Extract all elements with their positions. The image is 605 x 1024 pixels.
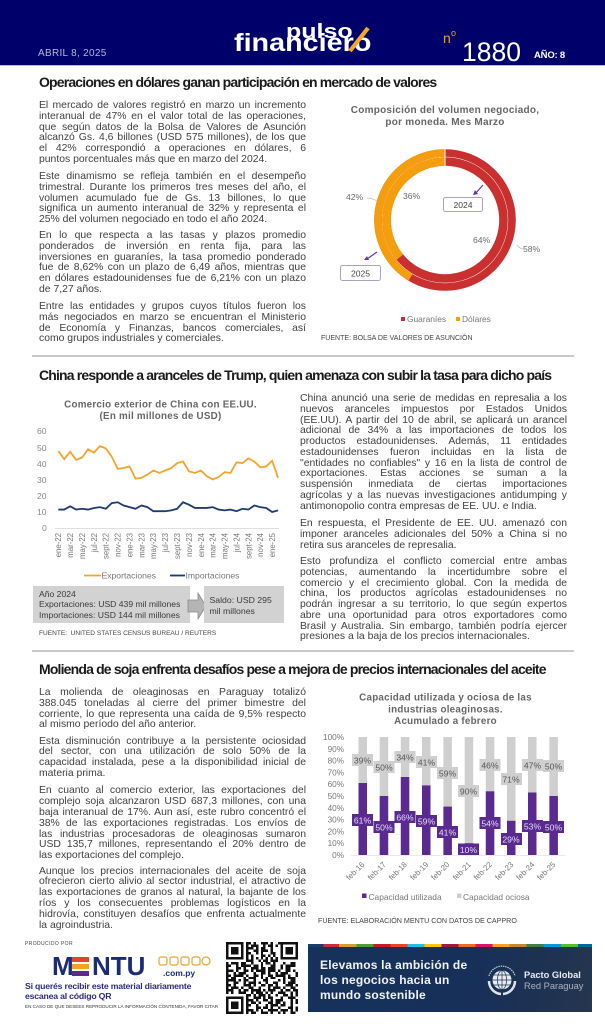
legend: Capacidad ociosa: [463, 892, 530, 902]
x axis labels: jul-24: [232, 532, 242, 553]
text block: section 3: del sector, con una utilización de solo 50% de la: [39, 746, 306, 757]
text block: section 2: potencias, aumentando la incertidumbre sobre el: [300, 567, 567, 578]
footer: producido por: [25, 941, 218, 1009]
text block: section 1: de Economía y Finanzas, bancos comerciales, así: [39, 323, 306, 334]
x axis labels: ene-25: [268, 532, 277, 557]
icon: UN Global Compact: [488, 966, 516, 996]
labels: capacidad utilizada: 29%: [502, 834, 520, 844]
x axis labels: nov-24: [256, 532, 265, 557]
text block: section 1: Entre las entidades y grupos cuyos títulos fueron los: [39, 301, 306, 312]
text block: section 2: estadounidenses fueron incluidas en la lista de: [300, 447, 567, 458]
text block: section 3: La molienda de oleaginosas en Paraguay totalizó: [39, 687, 306, 698]
legend: [362, 892, 530, 902]
text block: section 2: presiones a la baja de los precios internacionales.: [300, 631, 530, 642]
source: section 1: FUENTE: BOLSA DE VALORES DE ASUNCIÓN: [321, 335, 473, 342]
x axis labels: feb-25: [535, 860, 558, 882]
text block: section 2: Esto profundiza el conflicto comercial entre ambas: [300, 556, 567, 567]
text block: section 2: podrán ingresar a su territorio, lo que según expertos: [300, 599, 567, 610]
x axis labels: mar-24: [208, 532, 218, 558]
arrow: saldo: [188, 592, 204, 620]
labels: capacidad ociosa: 34%: [396, 752, 414, 762]
labels: capacidad ociosa: 47%: [524, 760, 541, 770]
text block: section 1: de 7,27 años.: [39, 284, 102, 295]
chart: donut composición por moneda: [340, 105, 541, 324]
text block: section 3: corriente, lo que representa una caída de 9,5% respecto: [39, 709, 306, 720]
callout: año 2024: Exportaciones: USD 439 mil millones: [39, 599, 180, 609]
y axis labels: 40: [37, 459, 47, 469]
text block: section 3: Esta disminución contribuye a la persistente ociosidad: [39, 736, 306, 747]
y axis labels: 60: [37, 426, 47, 436]
y axis labels: 10%: [328, 839, 344, 848]
callout: año 2024: [33, 586, 190, 623]
text block: section 2: abre una oportunidad para otros exportadores como: [300, 610, 567, 621]
logo: pulso financiero: pulso: [286, 21, 352, 43]
x axis labels: feb-17: [366, 860, 388, 882]
x axis labels: ene-22: [54, 533, 63, 557]
chart title: Capacidad utilizada y ociosa de las: [359, 692, 532, 704]
labels: capacidad ociosa: 39%: [354, 756, 371, 766]
x axis labels: ene-23: [126, 533, 134, 557]
text block: section 1: fue de 8,62% con un plazo de 6,49 años, mientras que: [39, 262, 306, 273]
x axis labels: mar-23: [138, 533, 146, 558]
SDG colour strip: [308, 944, 592, 947]
text block: section 1: interanual de 47% en el valor total de las operaciones,: [39, 111, 306, 122]
text block: section 3: la agroindustria.: [39, 920, 113, 931]
value labels: 58%: [523, 244, 541, 254]
source: section 2: FUENTE: UNITED STATES CENSUS BUREAU / REUTERS: [39, 630, 216, 637]
heading: section 1: Operaciones en dólares ganan participación en mercado de valores: [39, 74, 436, 90]
x axis labels: ene-24: [197, 532, 206, 557]
text block: section 2: exportaciones. Estas acciones se suman a la: [300, 468, 567, 479]
text block: section 2: suspensión inmediata de ciertas importaciones: [300, 479, 567, 490]
text block: section 2: En respuesta, el Presidente de EE. UU. amenazó con: [300, 518, 567, 529]
labels: capacidad ociosa: 71%: [502, 774, 520, 784]
logo: MENTU: NTU: [92, 951, 145, 981]
labels: capacidad utilizada: 66%: [396, 812, 414, 822]
y axis labels: [37, 426, 47, 533]
text block: section 2: imponer aranceles adicionales del 50% a China si no: [300, 529, 567, 540]
x axis labels: feb-21: [451, 860, 473, 882]
text block: section 1: [39, 100, 306, 344]
text block: section 3: las exportaciones del complejo.: [39, 850, 184, 861]
text block: section 1: en dólares estadounidenses fue de 6,21% con un plazo: [39, 273, 306, 284]
value labels: 36%: [403, 191, 421, 201]
text block: section 2: china, los productos agrícolas estadounidenses no: [300, 588, 567, 599]
y axis labels: 0: [42, 523, 47, 533]
x axis labels: feb-18: [387, 860, 409, 882]
text block: section 2: (EE.UU). A partir del 10 de abril, se aplicará un arancel: [300, 414, 567, 426]
text block: section 2: China anunció una serie de medidas en represalia a los: [300, 393, 567, 404]
legend: Exportaciones: [102, 570, 156, 580]
text block: section 2: productos estadounidenses. Además, 11 entidades: [300, 436, 567, 447]
text block: section 3: USD 135,7 millones, representando el 20% dentro de: [39, 839, 306, 850]
y axis labels: 50%: [328, 792, 344, 801]
x axis labels: feb-20: [429, 860, 452, 882]
value labels: [346, 191, 541, 254]
text block: section 3: capacidad instalada, pese a la disponibilidad inicial de: [39, 757, 306, 768]
x axis labels: jul-22: [90, 533, 99, 553]
bars: capacidad ociosa: [358, 737, 558, 855]
banner message: [320, 958, 467, 1002]
banner logo text: [524, 970, 584, 991]
text block: section 1: En lo que respecta a las tasas y plazos promedio: [39, 230, 306, 241]
callout 2024: 2024: [453, 200, 473, 210]
banner message: los negocios hacia un: [320, 973, 450, 987]
text block: section 3: ofrecieron cierto alivio al sector industrial, el atractivo de: [39, 876, 306, 887]
heading: section 3: Molienda de soja enfrenta desafíos pese a mejora de precios internacionales del aceite: [39, 661, 546, 677]
text block: section 2: antimonopolio contra empresas de EE. UU. e India.: [300, 500, 537, 512]
chart title: (En mil millones de USD): [100, 411, 221, 422]
banner: Pacto Global: [308, 944, 592, 1012]
y axis labels: 20: [37, 491, 47, 501]
outer ring 2025: [378, 153, 512, 287]
chart title: Acumulado a febrero: [394, 716, 497, 727]
labels: capacidad utilizada: 41%: [439, 828, 456, 838]
call to action: Si querés recibir este material diariamente: [25, 981, 191, 991]
chart title: por moneda. Mes Marzo: [385, 117, 505, 128]
value labels: 64%: [473, 235, 491, 245]
x axis labels: jul-23: [161, 533, 170, 553]
text block: section 1: ponderados de inversión en renta fija, para las: [39, 241, 306, 252]
x axis labels: mar-22: [66, 533, 75, 558]
labels: capacidad utilizada: [352, 811, 564, 855]
x axis labels: [344, 860, 558, 882]
logo: MENTU: [52, 951, 145, 981]
text block: section 3: complejo soja alcanzaron USD 687,3 millones, con una: [39, 796, 306, 807]
chart title: Composición del volumen negociado,: [351, 105, 539, 116]
callout: saldo: [204, 586, 284, 623]
text block: section 2: [300, 393, 568, 642]
produced-by label: PRODUCIDO POR: [25, 941, 73, 947]
chart title: industrias oleaginosas.: [388, 704, 503, 716]
legend: Capacidad utilizada: [368, 892, 442, 902]
call to action: escanea al código QR: [25, 990, 111, 1000]
text block: section 1: que según datos de la Bolsa de Valores de Asunción: [39, 122, 306, 133]
labels: capacidad utilizada: 54%: [481, 818, 499, 828]
y axis labels: 50: [37, 443, 47, 453]
text block: section 1: puntos porcentuales más que en marzo del 2024.: [39, 154, 267, 165]
y axis labels: 100%: [323, 733, 344, 742]
y axis labels: 0%: [332, 851, 344, 860]
bars: capacidad utilizada: [358, 777, 558, 855]
callout: saldo: Saldo: USD 295: [210, 595, 272, 605]
y axis labels: 80%: [328, 757, 344, 766]
labels: capacidad utilizada: 50%: [545, 822, 562, 832]
x axis labels: feb-23: [493, 860, 515, 882]
text block: section 3: En cuanto al comercio exterior, las exportaciones del: [39, 785, 306, 796]
text block: section 1: El mercado de valores registró en marzo un incremento: [39, 100, 306, 111]
text block: section 3: hidrovía, constituyen desafíos que enfrenta actualmente: [39, 909, 306, 920]
x axis labels: may-23: [149, 533, 158, 559]
labels: capacidad utilizada: 50%: [375, 822, 393, 832]
logo: pulso financiero: financiero: [234, 29, 371, 57]
legend: Dólares: [462, 314, 491, 324]
x axis labels: feb-16: [344, 860, 366, 882]
y axis labels: 20%: [328, 827, 344, 836]
x axis labels: feb-24: [514, 860, 537, 882]
y axis labels: 90%: [328, 745, 344, 754]
text block: section 2: agrícolas y a las nuevas investigaciones antidumping y: [300, 490, 567, 501]
logo: MENTU: M: [52, 951, 74, 981]
icon: QR code: [226, 942, 298, 1014]
legend: [84, 570, 239, 580]
text block: section 1: Este dinamismo se refleja también en el desempeño: [39, 171, 306, 182]
x axis labels: nov-22: [114, 533, 122, 557]
labels: capacidad utilizada: 53%: [524, 822, 541, 832]
text block: section 2: "entidades no confiables" y 16 en la lista de control de: [300, 458, 567, 468]
text block: section 3: las exportaciones de granos al natural, la bajante de los: [39, 887, 306, 898]
labels: capacidad ociosa: 41%: [418, 758, 435, 768]
text block: section 3: baja interanual de 17%. Aun así, este rubro concentró el: [39, 807, 306, 818]
text block: section 3: [39, 687, 306, 931]
labels: capacidad ociosa: 50%: [545, 762, 562, 772]
logo slash: [348, 26, 370, 52]
x axis labels: may-22: [78, 533, 87, 559]
labels: capacidad ociosa: 90%: [460, 786, 477, 796]
labels: capacidad ociosa: 59%: [439, 768, 456, 778]
y axis labels: 60%: [328, 780, 344, 789]
callout: año 2024: Año 2024: [39, 589, 76, 599]
text block: section 2: Brasil y Australia. Sin embargo, también podría ejercer: [300, 620, 567, 632]
x axis labels: feb-22: [472, 860, 494, 882]
banner logo text: Pacto Global: [524, 970, 581, 980]
chart: comercio exterior China con EE.UU.: [37, 400, 279, 580]
banner message: mundo sostenible: [320, 988, 426, 1002]
heading: section 2: China responde a aranceles de Trump, quien amenaza con subir la tasa para dicho país: [39, 367, 551, 383]
line: exportaciones: [58, 446, 278, 479]
text block: section 2: retira sus aranceles de represalia.: [300, 540, 457, 550]
banner logo text: Red Paraguay: [524, 981, 583, 991]
y axis labels: 10: [37, 507, 47, 517]
text block: section 1: alcanzó Gs. 4,6 billones (USD 575 millones), de los que: [39, 132, 306, 143]
logo bars: [72, 957, 89, 976]
issue number: AÑO: 8: [534, 50, 565, 61]
y axis labels: 30%: [328, 816, 344, 825]
social icons and domain: .com.py: [163, 968, 195, 978]
labels: capacidad ociosa: 50%: [375, 762, 393, 772]
source: section 3: FUENTE: ELABORACIÓN MENTU CON DATOS DE CAPPRO: [318, 917, 517, 925]
date: ABRIL 8, 2025: [38, 48, 107, 59]
callout 2025: [340, 252, 380, 280]
header band: [0, 0, 605, 66]
text block: section 1: significa un aumento interanual de 32% y representa el: [39, 203, 306, 214]
text block: section 3: Aunque los precios internacionales del aceite de soja: [39, 866, 306, 877]
text block: section 3: al mismo período del año anterior.: [39, 719, 196, 730]
callout: saldo: mil millones: [210, 606, 255, 616]
text block: section 3: las industrias procesadoras de oleaginosas sumaron: [39, 829, 306, 840]
x axis labels: [54, 532, 277, 559]
text block: section 1: 25% del volumen negociado en todo el año 2024.: [39, 214, 267, 225]
text block: section 3: ríos y los consecuentes problemas logísticos en la: [39, 898, 306, 909]
text block: section 1: como grupos industriales y comerciales.: [39, 333, 224, 344]
labels: capacidad utilizada: 59%: [418, 816, 435, 826]
issue number: [443, 28, 565, 67]
issue number: 1880: [462, 37, 521, 67]
labels: capacidad utilizada: 61%: [354, 816, 371, 826]
x axis labels: nov-23: [185, 533, 194, 557]
y axis labels: 70%: [328, 768, 344, 777]
text block: section 2: nuevos aranceles impuestos por Estados Unidos: [300, 404, 567, 415]
text block: section 2: adicional de 34% a las importaciones de todos los: [300, 425, 567, 436]
labels: capacidad ociosa: 46%: [481, 760, 499, 770]
text block: section 1: más negociados en marzo se encuentran el Ministerio: [39, 312, 306, 323]
inner ring 2024: [386, 162, 504, 278]
x axis labels: sept-24: [244, 532, 254, 559]
value labels: 42%: [346, 192, 364, 202]
callout: año 2024: Importaciones: USD 144 mil millones: [39, 610, 180, 620]
text block: section 3: 38% de las exportaciones registradas. Los envíos de: [39, 818, 306, 829]
y axis labels: 40%: [328, 804, 344, 813]
banner message: Elevamos la ambición de: [320, 958, 467, 972]
text block: section 3: 388.045 toneladas al cierre del primer bimestre del: [39, 698, 306, 709]
text block: section 2: comercio y el crecimiento global. Con la medida de: [300, 578, 567, 588]
disclaimer: EN CASO DE QUE DESEES REPRODUCIR LA INFORMACIÓN CONTENIDA, FAVOR CITAR: [25, 1004, 218, 1009]
chart: capacidad utilizada y ociosa: [323, 692, 565, 902]
legend: Importaciones: [186, 570, 239, 580]
callout 2025: 2025: [351, 268, 370, 278]
text block: section 1: inversiones en guaraníes, la tasa promedio ponderado: [39, 252, 306, 263]
social icons and domain: [158, 956, 211, 978]
x axis labels: sept-22: [102, 533, 110, 559]
text block: section 3: materia prima.: [39, 768, 105, 779]
x axis labels: sept-23: [173, 533, 182, 559]
call to action: [25, 981, 192, 1000]
y axis labels: [323, 733, 344, 860]
text block: section 1: trimestral. Durante los primeros tres meses del año, el: [39, 182, 306, 193]
legend: Guaraníes: [407, 314, 446, 324]
issue number: o: [451, 28, 456, 38]
x axis labels: feb-19: [408, 860, 430, 882]
x axis labels: may-24: [220, 532, 230, 559]
line: importaciones: [58, 502, 278, 512]
legend: [401, 314, 491, 324]
text block: section 1: el 42% correspondió a operaciones en dólares, 6: [39, 143, 306, 154]
callout 2024: [444, 185, 483, 212]
labels: capacidad utilizada: 10%: [460, 845, 477, 855]
text block: section 1: volumen acumulado fue de Gs. 13 billones, lo que: [39, 193, 306, 204]
labels: capacidad ociosa: [352, 751, 564, 797]
issue number: n: [443, 30, 451, 46]
chart title: Comercio exterior de China con EE.UU.: [64, 400, 257, 410]
y axis labels: 30: [37, 475, 47, 485]
